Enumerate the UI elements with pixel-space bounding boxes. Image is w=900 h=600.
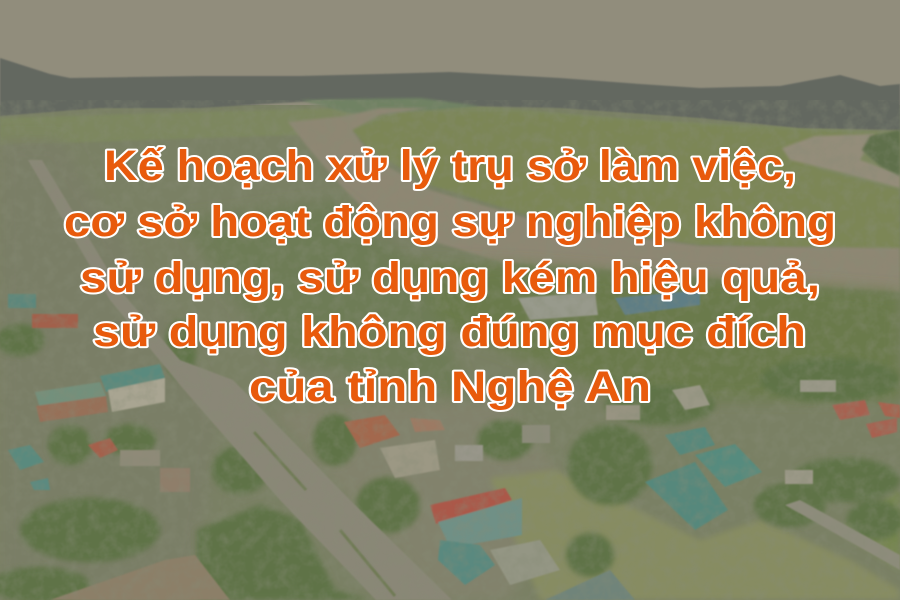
title: multi-line heading xyxy=(64,142,836,411)
title: multi-line heading: Kế hoạch xử lý trụ sở làm việc, xyxy=(104,142,796,190)
fields behind river xyxy=(0,106,900,190)
title: multi-line heading: sử dụng không đúng mục đích xyxy=(93,308,806,356)
sky xyxy=(0,0,900,110)
tree clumps xyxy=(0,320,900,600)
town left xyxy=(0,140,220,600)
title: multi-line heading: của tỉnh Nghệ An xyxy=(249,363,651,411)
title: multi-line heading: cơ sở hoạt động sự nghiệp không xyxy=(64,198,836,246)
main road xyxy=(28,160,452,600)
mountains xyxy=(0,58,900,130)
river xyxy=(288,108,900,292)
tree bank xyxy=(360,260,900,400)
title: multi-line heading: sử dụng, sử dụng kém hiệu quả, xyxy=(80,254,820,302)
middle field across river xyxy=(352,112,900,250)
building roofs xyxy=(8,290,900,600)
town mid xyxy=(270,400,560,600)
field right xyxy=(490,470,900,600)
